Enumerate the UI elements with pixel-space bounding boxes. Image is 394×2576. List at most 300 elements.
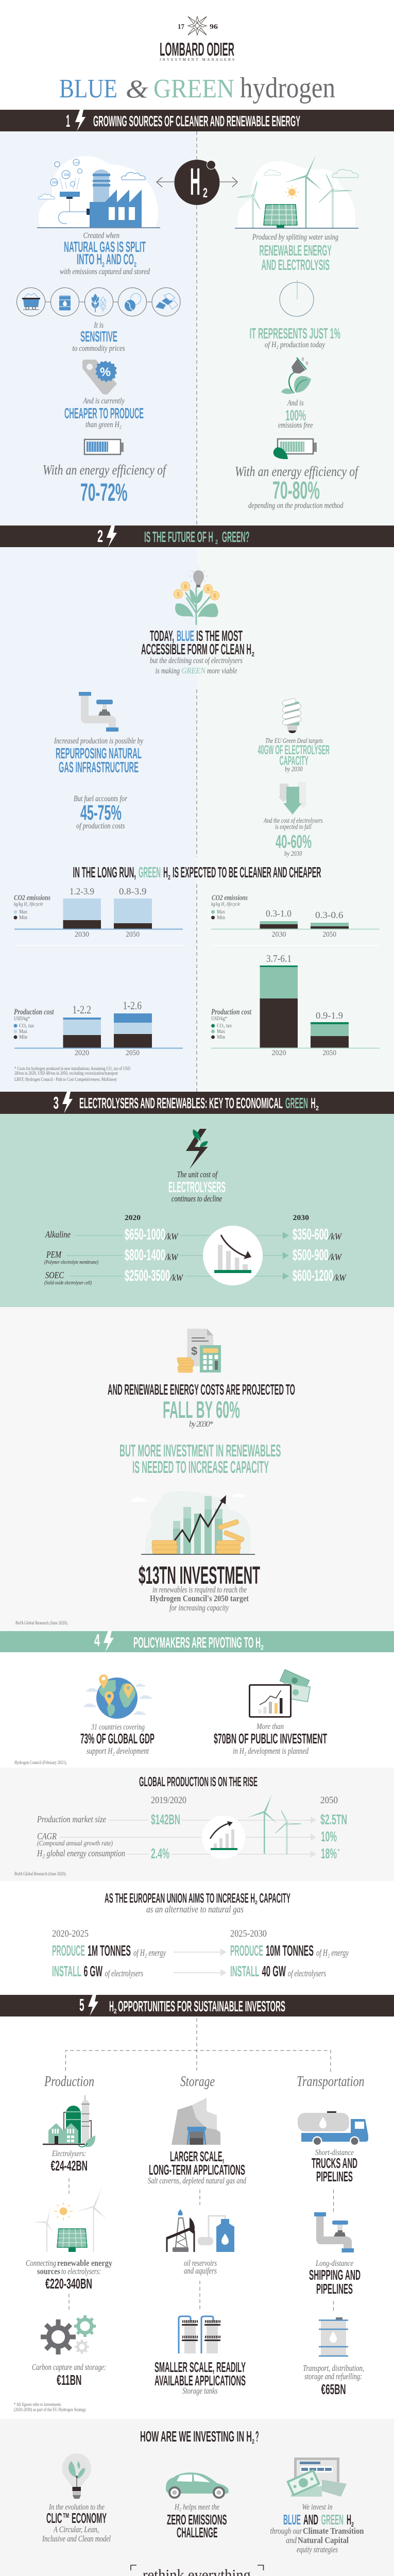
text: blue efficiency: [43, 462, 167, 506]
chart: blue production cost: 1-2.2: [72, 1003, 91, 1016]
chart: blue production cost: Min: [19, 1034, 27, 1040]
table: eu targets: 2020-2025: [52, 1928, 89, 1939]
table: electrolyser cost rows: $500-900: [293, 1246, 329, 1264]
table: production growth: CAGR: [37, 1831, 57, 1841]
text: connecting renewable energy: sources: [37, 2266, 60, 2276]
table: eu targets: INSTALL: [230, 1963, 260, 1980]
panel: global production: [0, 1768, 394, 1881]
text: renewable energy costs fall: [108, 1382, 295, 1429]
text: electrolyser costs fall: 40-60%: [276, 831, 312, 852]
heading: section 4 band: [0, 1631, 394, 1652]
chart: green production cost: USD/kg*: [211, 1015, 227, 1022]
text: trucks and pipelines: Short-distance: [315, 2148, 354, 2157]
text: 70bn public investment: [214, 1722, 327, 1756]
table: eu targets: PRODUCE: [230, 1943, 263, 1959]
text: carbon capture: [32, 2362, 106, 2388]
icon: blue hydrogen factory: CO2: [52, 181, 58, 184]
text: repurposing natural gas: [54, 737, 144, 776]
heading: section 5 band: H: [109, 1998, 114, 2015]
title: BLUE: [59, 74, 117, 104]
text: clic economy: [42, 2503, 111, 2544]
text: LOMBARD ODIER: [160, 39, 234, 60]
text: today blue is the most accessible: TODAY,: [150, 628, 174, 645]
text: blue efficiency: 70-72%: [80, 479, 128, 506]
text: created when: Created when: [83, 231, 119, 240]
heading: transportation: Transportation: [297, 2074, 365, 2090]
text: we invest in blue and green: We invest in: [302, 2503, 333, 2512]
table: electrolyser cost rows: 2020: [125, 1214, 141, 1222]
table: electrolyser cost rows: /kW: [328, 1231, 342, 1242]
table: electrolyser cost rows: /kW: [165, 1252, 179, 1262]
icon: gears: [41, 2315, 96, 2354]
text: smaller scale: [155, 2359, 246, 2396]
icon: tanker truck: [298, 2111, 368, 2146]
text: today blue is the most accessible: GREEN: [181, 667, 206, 675]
table: electrolyser cost rows: [44, 1214, 347, 1286]
icon: money plant with lightbulb: $: [184, 584, 187, 590]
text: clic economy: TM: [63, 2512, 69, 2519]
icon: gold bars: [156, 293, 178, 309]
heading: section 3 band: 2: [316, 1105, 319, 1112]
icon: rising chart with coins: [132, 1491, 255, 1554]
icon: price tag: %: [100, 365, 111, 379]
text: oil reservoirs: oil reservoirs: [184, 2258, 217, 2268]
table: electrolyser cost rows: /kW: [328, 1252, 342, 1262]
footnote: figures: [14, 2402, 86, 2412]
text: it represents just 1%: of H₂ production today: [265, 341, 326, 349]
chart: blue production cost: 1-2.6: [123, 999, 142, 1012]
panel: blue hydrogen: CHEAPER TO PRODUCE: [64, 405, 144, 422]
heading: section 4 band: 4: [94, 1631, 100, 1650]
text: 13tn investment: in renewables is required to reach the: [152, 1585, 247, 1595]
text: carbon capture: €11BN: [57, 2372, 81, 2388]
chart: green production cost: [211, 953, 380, 1057]
text: fuel 45-75%: 45-75%: [80, 801, 122, 824]
text: we invest in blue and green: through our: [270, 2526, 302, 2536]
text: 13tn investment: for increasing capacity: [169, 1603, 229, 1613]
title: [59, 72, 335, 104]
heading: in the long run: 2: [168, 874, 170, 881]
icon: rising bar chart: [202, 1816, 245, 1859]
chart: green production cost: 0.9-1.9: [316, 1010, 343, 1021]
text: electrolyser costs fall: by 2030: [284, 850, 302, 858]
table: production growth: (Compound annual growth rate): [37, 1840, 113, 1848]
text: produced by splitting water: Produced by splitting water using: [252, 233, 338, 242]
text: 70bn public investment: More than: [256, 1722, 284, 1731]
text: 100% emissions free: [278, 399, 313, 430]
text: sensitive: to commodity prices: [72, 344, 125, 353]
table: electrolyser cost rows: Alkaline: [45, 1229, 71, 1240]
text: renewable energy costs fall: FALL BY 60%: [163, 1396, 240, 1423]
chart: blue CO2 emissions: 1.2-3.9: [70, 886, 94, 896]
text: 73% of global gdp: 31 countries covering: [91, 1723, 145, 1732]
text: today blue is the most accessible: more viable: [207, 667, 237, 675]
text: zero emissions challenge: CHALLENGE: [177, 2524, 217, 2540]
table: electrolyser cost rows: $2500-3500: [125, 1266, 170, 1284]
text: clic economy: Inclusive and Clean model: [42, 2534, 111, 2544]
text: REPURPOSING NATURAL: [56, 745, 142, 762]
icon: electrolyser plant: [43, 2095, 95, 2147]
text: today blue is the most accessible: IS THE MOST: [196, 628, 243, 645]
text: trucks and pipelines: [312, 2148, 357, 2184]
text: GAS INFRASTRUCTURE: [59, 759, 139, 776]
icon: globe with pins: [83, 1674, 152, 1719]
text: created when: NATURAL GAS IS SPLIT: [64, 239, 146, 256]
chart: blue CO2 emissions: 2050: [126, 930, 140, 939]
icon: money plant with lightbulb: $: [213, 593, 216, 599]
text: cheaper to produce: [64, 397, 144, 429]
chart: green CO2 emissions: 0.3-0.6: [315, 910, 343, 920]
chart: green CO2 emissions: 2030: [272, 930, 286, 939]
text: zero emissions challenge: H₂ helps meet the: [174, 2503, 219, 2512]
table: eu targets: of H₂ energy: [133, 1947, 166, 1958]
text: transport distribution: storage and refuelling:: [304, 2371, 362, 2381]
text: carbon capture: Carbon capture and storage:: [32, 2362, 106, 2372]
footnote: chart sources: 28/ton in 2020, USD 48/ton in 2050, excluding vectorization/transport: [14, 1071, 118, 1076]
panel: blue hydrogen: [0, 131, 197, 526]
icon: falling arrows: [278, 782, 308, 815]
icon: car: [166, 2472, 229, 2499]
text: we invest in blue and green: equity strategies: [297, 2545, 338, 2554]
header logo: 17: [178, 23, 184, 31]
text: connecting renewable energy: renewable energy: [57, 2258, 112, 2268]
chart: blue CO2 emissions: Max: [19, 909, 27, 915]
heading: in the long run: H: [163, 865, 168, 881]
heading: section 4 band: 2: [261, 1643, 264, 1651]
text: unit cost of electrolysers: continues to decline: [172, 1194, 222, 1204]
heading: section 2 band: IS THE FUTURE OF H: [144, 529, 213, 546]
table: eu targets: of electrolysers: [105, 1968, 143, 1978]
text: shipping and pipelines: PIPELINES: [316, 2281, 353, 2297]
icon: H2 molecule with arrows: H: [190, 160, 200, 203]
text: we invest in blue and green: BLUE: [283, 2512, 301, 2528]
text: created when: AND CO: [106, 251, 134, 268]
table: eu targets: INSTALL: [52, 1963, 81, 1980]
text: created when: 2: [102, 261, 105, 268]
text: created when: [60, 231, 150, 276]
icon: H2 molecule with arrows: 2: [203, 185, 208, 200]
chart: blue production cost: 2050: [126, 1049, 140, 1057]
text: oil reservoirs: and aquifers: [184, 2266, 217, 2276]
icon: coffee beans: [125, 292, 143, 311]
heading: section 3 band: 3: [54, 1093, 59, 1112]
icon: oil barrel: [59, 295, 71, 311]
text: larger scale: Salt caverns, depleted natural gas and: [148, 2176, 246, 2185]
chart: green CO2 emissions: kg/kg H₂ lifecycle: [211, 901, 241, 907]
text: unit cost of electrolysers: The unit cost of: [177, 1170, 218, 1179]
heading: in the long run: IN THE LONG RUN,: [73, 865, 136, 881]
text: connecting renewable energy: [26, 2258, 112, 2292]
table: electrolyser cost rows: /kW: [165, 1231, 179, 1242]
heading: section 2 band: [0, 526, 394, 547]
icon: plug with leaf: [281, 357, 311, 394]
text: electrolyser costs fall: And the cost of electrolysers: [263, 817, 323, 825]
text: clic economy: A Circular, Lean,: [53, 2524, 99, 2534]
text: sensitive: It is: [94, 321, 104, 330]
text: 13tn investment: [139, 1562, 260, 1613]
chart: green production cost: Production cost: [211, 1008, 251, 1016]
chart: green CO2 emissions: [211, 894, 380, 945]
chart: blue CO2 emissions: kg/kg H₂ lifecycle: [14, 901, 43, 907]
icon: blue hydrogen factory: CO2: [64, 174, 69, 177]
text: clic economy: ECONOMY: [72, 2510, 107, 2526]
table: electrolyser cost rows: PEM: [46, 1249, 62, 1260]
icon: coal cart: [22, 293, 40, 310]
table: electrolyser cost rows: 2030: [293, 1214, 309, 1222]
table: production growth: $142BN: [151, 1811, 180, 1827]
panel: renewable costs and investment: [0, 1307, 394, 1631]
heading: how are we investing: 2: [252, 2438, 254, 2445]
icon: money plant with lightbulb: $: [177, 591, 180, 598]
heading: storage: Storage: [180, 2074, 215, 2090]
icon: wheat: [92, 294, 106, 312]
text: we invest in blue and green: Natural Capital: [298, 2535, 349, 2545]
footnote: chart sources: * Costs for hydrogen produced in new installations; Assuming CO₂ tax of USD: [14, 1066, 130, 1071]
chart: green production cost: Max: [217, 1028, 225, 1035]
footnote: chart sources: LBST; Hydrogen Council - Path to Cost Competitiveness; McKinsey: [14, 1077, 117, 1082]
table: eu targets: 10M TONNES: [266, 1943, 314, 1959]
icon: natural gas pipe: [79, 692, 118, 732]
chart: blue production cost: CO₂ tax: [19, 1023, 34, 1029]
chart: blue production cost: Max: [19, 1028, 27, 1035]
chart: green production cost: 3.7-6.1: [266, 953, 292, 964]
icon: pipe and valve: [314, 2212, 354, 2252]
text: ACCESSIBLE FORM OF CLEAN H: [141, 641, 251, 658]
text: blue efficiency: With an energy efficiency of: [43, 462, 167, 478]
icon: money plant with lightbulb: $: [207, 586, 210, 592]
icon: fuel barrel: [319, 2317, 348, 2357]
table: electrolyser cost rows: $800-1400: [125, 1246, 165, 1264]
chart: blue CO2 emissions: 0.8-3.9: [119, 886, 146, 896]
heading: section 3 band: GREEN: [285, 1095, 308, 1112]
icon: blue battery: [84, 439, 124, 454]
text: more investment needed: [119, 1441, 281, 1477]
icon: bill and calculator: [177, 1329, 221, 1372]
panel: how are we investing: ?: [255, 2429, 259, 2445]
panel: global production: GLOBAL PRODUCTION IS ON THE RISE: [139, 1774, 258, 1789]
table: production growth: 18%: [321, 1845, 337, 1861]
text: fuel 45-75%: But fuel accounts for: [74, 794, 128, 803]
column: storage: [148, 2074, 246, 2396]
heading: section 3 band: H: [311, 1095, 315, 1112]
text: trucks and pipelines: PIPELINES: [316, 2168, 353, 2184]
text: 13tn investment: Hydrogen Council's 2050 target: [150, 1594, 249, 1603]
table: production growth: 2019/2020: [151, 1795, 186, 1806]
heading: in the long run: [73, 865, 321, 881]
chart: blue production cost: USD/kg*: [14, 1015, 30, 1022]
icon: blue hydrogen factory: [37, 156, 160, 228]
heading: section 2 band: 2: [215, 538, 218, 546]
title: GREEN: [153, 74, 234, 104]
heading: section 1 band: [0, 110, 394, 131]
text: SMALLER SCALE, READILY: [155, 2359, 246, 2375]
panel: section 2 backgrounds: [0, 547, 394, 1092]
table: eu targets: PRODUCE: [52, 1943, 85, 1959]
text: eu green deal: [258, 737, 330, 773]
text: clic economy: CLIC: [46, 2510, 62, 2526]
text: green efficiency: 70-80%: [272, 477, 320, 504]
table: production growth: 2.4%: [151, 1845, 169, 1861]
footnote: chart sources: [14, 1066, 130, 1082]
text: 100% emissions free: emissions free: [278, 421, 313, 430]
panel: green hydrogen: [197, 131, 394, 526]
text: larger scale: LARGER SCALE,: [170, 2148, 224, 2164]
table: production growth: Production market size: [37, 1814, 106, 1824]
text: today blue is the most accessible: [141, 628, 254, 675]
icon: chart with banknotes: [249, 1669, 310, 1717]
column: production: [14, 2074, 112, 2412]
chart: green CO2 emissions: 0.3-1.0: [266, 908, 292, 919]
chart: 1% pie: [280, 280, 314, 316]
footnote: figures: (2020-2030) as part of the EU Hydrogen Strategy: [14, 2407, 86, 2412]
text: transport distribution: Transport, distribution,: [303, 2363, 364, 2373]
icon: bill and calculator: $: [191, 1345, 197, 1358]
icon: spiral bulb: [282, 698, 302, 733]
chart: blue production cost: [13, 999, 183, 1057]
text: electrolyser costs fall: [263, 817, 323, 858]
table: production growth: H₂ global energy consumption: [37, 1848, 125, 1858]
table: electrolyser cost rows: (Solid oxide electrolyser cell): [44, 1280, 92, 1286]
icon: oil pump and tank: [166, 2209, 234, 2252]
text: 100% emissions free: 100%: [285, 408, 306, 424]
icon: wind turbines: [247, 1794, 301, 1854]
header logo: [160, 16, 234, 62]
header logo: INVESTMENT MANAGERS: [160, 58, 234, 62]
heading: section 5 band: 2: [114, 2007, 116, 2015]
chart: blue production cost: 2020: [75, 1049, 89, 1057]
text: green efficiency: depending on the production method: [248, 501, 344, 510]
table: electrolyser cost rows: $600-1200: [293, 1266, 333, 1284]
table: eu targets: of electrolysers: [288, 1968, 326, 1978]
text: shipping and pipelines: Long-distance: [315, 2259, 353, 2268]
icon: money plant with lightbulb: [174, 567, 219, 625]
text: electrolysers: €24-42BN: [50, 2158, 88, 2174]
heading: section 2 band: GREEN?: [222, 529, 249, 546]
text: repurposing natural gas: Increased production is possible by: [54, 737, 144, 745]
chart: blue production cost: Production cost: [13, 1008, 54, 1016]
heading: european union aims: as an alternative to natural gas: [146, 1904, 244, 1915]
table: production growth: [37, 1795, 347, 1861]
heading: production: Production: [44, 2074, 94, 2090]
table: production growth: 10%: [321, 1828, 337, 1844]
icon: bulb with leaves: [62, 2453, 91, 2499]
text: we invest in blue and green: GREEN: [321, 2512, 344, 2528]
text: created when: INTO H: [77, 251, 102, 268]
table: electrolyser cost rows: $650-1000: [125, 1225, 165, 1243]
header logo: 96: [210, 23, 218, 31]
text: produced by splitting water: [252, 233, 338, 274]
text: created when: with emissions captured and stored: [60, 267, 150, 276]
panel: electrolyser costs: ELECTROLYSERS: [168, 1179, 226, 1196]
panel: how are we investing: [0, 2419, 394, 2576]
heading: european union aims: 2: [255, 1900, 258, 1906]
icon: price tag: [82, 360, 117, 395]
icon: salt cavern: [172, 2098, 220, 2145]
text: 100% emissions free: And is: [287, 399, 304, 408]
heading: section 5 band: [0, 1994, 394, 2016]
text: electrolysers: Electrolysers:: [52, 2149, 86, 2158]
text: electrolyser costs fall: is expected to fall: [275, 823, 312, 831]
text: we invest in blue and green: and: [286, 2535, 297, 2545]
heading: section 3 band: [0, 1092, 394, 1114]
icon: green battery with leaf: [273, 439, 317, 459]
icon: green energy scene: [235, 155, 358, 228]
table: electrolyser cost rows: (Polymer electrolyte membrane): [44, 1259, 98, 1265]
icon: H2 molecule with arrows: [157, 160, 237, 205]
chart: blue CO2 emissions: 2030: [75, 930, 89, 939]
icons: commodity circles: [16, 287, 180, 316]
panel: how are we investing: ZERO EMISSIONS: [167, 2512, 227, 2528]
text: smaller scale: Storage tanks: [182, 2386, 218, 2396]
text: oil reservoirs: [184, 2258, 217, 2276]
text: connecting renewable energy: Connecting: [26, 2258, 56, 2268]
heading: how are we investing: HOW ARE WE INVESTING IN H: [140, 2429, 252, 2445]
chart: green CO2 emissions: Min: [217, 914, 225, 921]
chart: green production cost: CO₂ tax: [217, 1023, 232, 1029]
text: larger scale: [148, 2148, 246, 2185]
text: it represents just 1%: [249, 326, 340, 349]
source note: BofA Global Research (June 2020).: [14, 1871, 66, 1876]
table: electrolyser cost rows: SOEC: [45, 1270, 64, 1280]
icon: blue hydrogen factory: CO2: [75, 161, 79, 164]
chart: green production cost: 2020: [272, 1049, 286, 1057]
text: we invest in blue and green: H: [347, 2512, 351, 2528]
text: sensitive: [72, 321, 125, 353]
text: we invest in blue and green: 2: [351, 2521, 354, 2528]
title: hydrogen: [240, 72, 335, 104]
text: we invest in blue and green: [270, 2503, 364, 2554]
heading: in the long run: GREEN: [139, 865, 161, 881]
text: transport distribution: [303, 2363, 364, 2397]
footnote: figures: * All figures refer to investments: [14, 2402, 61, 2407]
chart: green CO2 emissions: 2050: [322, 930, 336, 939]
icon: storage tanks: [179, 2316, 220, 2353]
icon: solar and wind: [32, 2188, 107, 2252]
heading: section 2 band: 2: [97, 527, 103, 546]
table: electrolyser cost rows: /kW: [333, 1273, 347, 1283]
text: LONG-TERM APPLICATIONS: [149, 2162, 245, 2178]
table: eu targets: 2025-2030: [230, 1928, 267, 1939]
text: eu green deal: CAPACITY: [279, 754, 309, 768]
table: eu targets: of H₂ energy: [316, 1947, 349, 1958]
chart: blue CO2 emissions: Min: [19, 914, 27, 921]
heading: european union aims: [105, 1890, 290, 1915]
text: 73% of global gdp: support H₂ development: [87, 1746, 149, 1756]
text: zero emissions challenge: [167, 2503, 227, 2540]
text: 73% of global gdp: [80, 1723, 155, 1756]
chart: green CO2 emissions: Max: [217, 909, 225, 915]
text: connecting renewable energy: €220-340BN: [45, 2276, 92, 2292]
text: today blue is the most accessible: but the declining cost of electrolysers: [150, 656, 243, 665]
heading: how are we investing: [140, 2429, 259, 2445]
heading: section 5 band: 5: [79, 1995, 84, 2014]
text: electrolysers: [50, 2149, 88, 2174]
heading: section 1 band: 1: [66, 111, 70, 130]
table: eu targets: 6 GW: [83, 1963, 102, 1980]
text: we invest in blue and green: Climate Transition: [303, 2526, 364, 2536]
text: CAPACITY: [260, 1890, 290, 1906]
text: AVAILABLE APPLICATIONS: [155, 2372, 246, 2388]
table: production growth: 2050: [320, 1795, 338, 1806]
text: 13tn investment: $13TN INVESTMENT: [139, 1562, 260, 1589]
chart: blue CO2 emissions: CO2 emissions: [14, 894, 50, 902]
text: eu green deal: by 2030: [285, 766, 303, 773]
source note: BofA Global Research (June 2020).: [15, 1620, 68, 1625]
text: green efficiency: With an energy efficiency of: [235, 464, 359, 479]
icon: strategy document with banknotes: [286, 2458, 347, 2497]
text: today blue is the most accessible: BLUE: [177, 628, 194, 645]
chart: green production cost: 2050: [322, 1049, 336, 1057]
